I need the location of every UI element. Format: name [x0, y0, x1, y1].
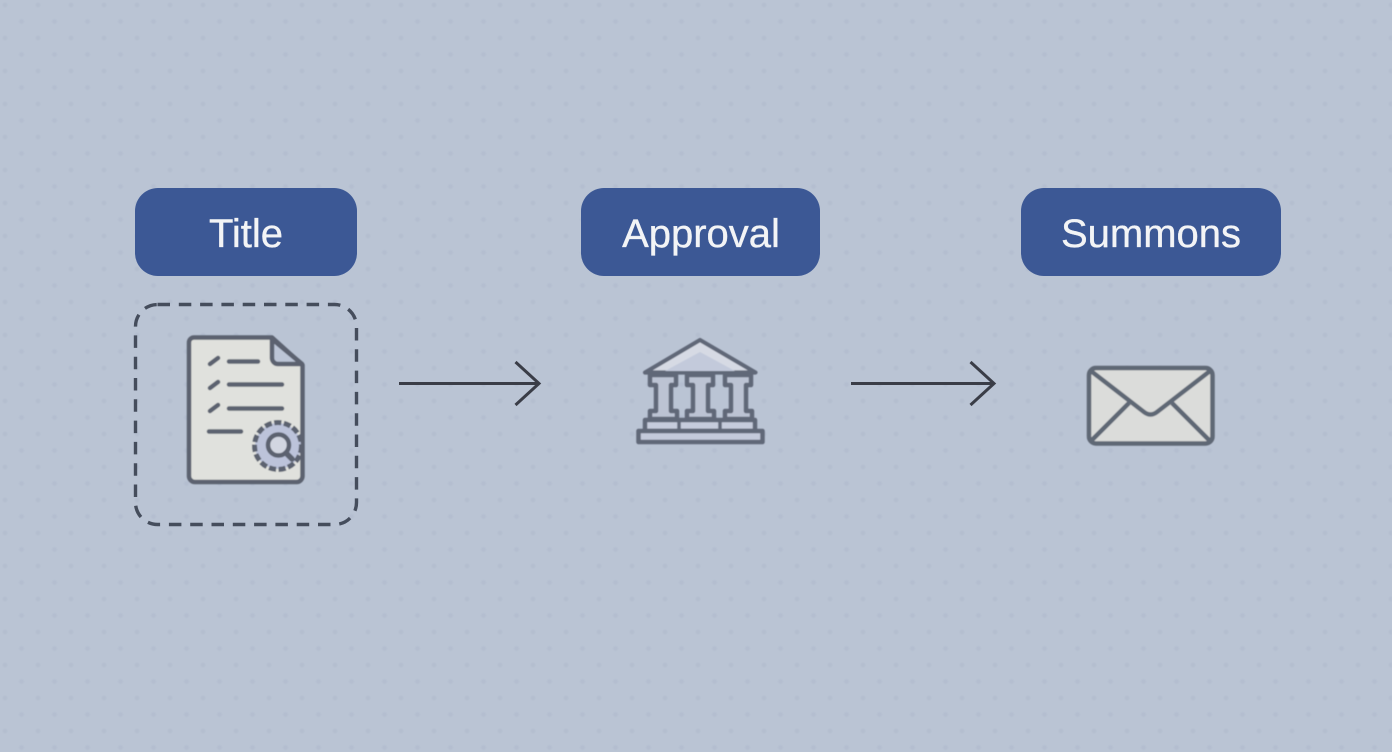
icon: title document with seal	[189, 338, 302, 482]
arrow: title to approval	[399, 362, 539, 405]
base	[645, 420, 755, 431]
label: Title	[135, 188, 357, 276]
arrow: approval to summons	[851, 362, 994, 405]
label: Approval	[581, 188, 820, 276]
label: Title: Title	[209, 212, 283, 256]
dashed frame around title icon	[136, 304, 356, 524]
columns	[650, 375, 752, 419]
roof	[645, 340, 756, 372]
icon: courthouse building	[638, 340, 762, 442]
label: Summons: Summons	[1061, 212, 1241, 256]
label: Summons	[1021, 188, 1281, 276]
icon: seal with magnifier	[255, 423, 301, 469]
label: Approval: Approval	[622, 212, 780, 256]
icon: envelope	[1089, 368, 1212, 444]
